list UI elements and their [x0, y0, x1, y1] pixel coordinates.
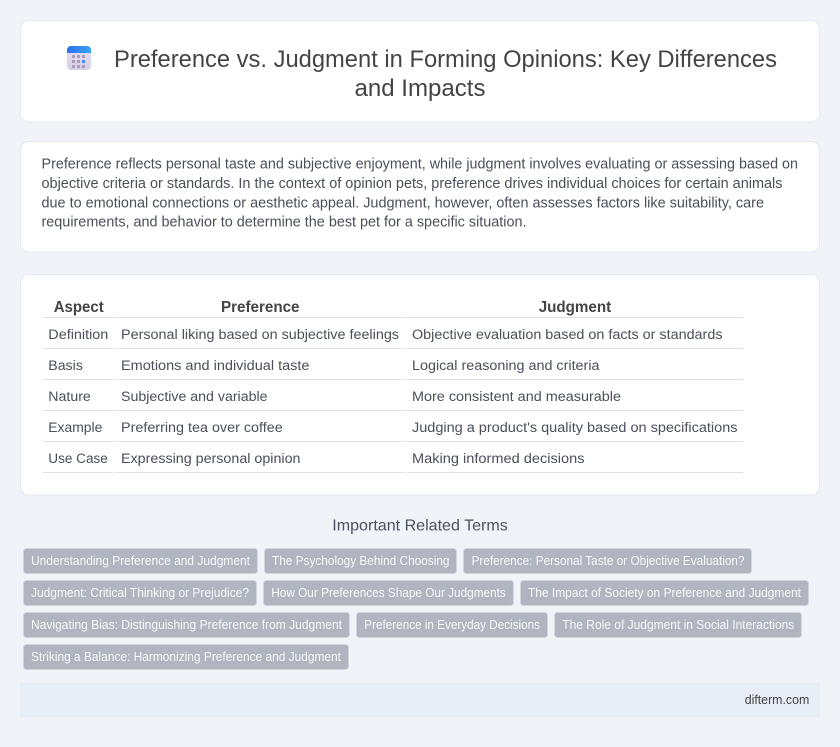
tag: role of judgment in social interactions	[554, 612, 802, 638]
tag: impact of society	[520, 580, 808, 606]
table row: use case	[43, 451, 743, 473]
intro paragraph: objective criteria or standards. In the context of opinion pets, preference drives individual choices for certain animals	[42, 176, 782, 192]
tag: understanding preference and judgment: Understanding Preference and Judgment	[31, 554, 250, 568]
related terms tags	[24, 548, 808, 670]
title: and Impacts	[354, 75, 486, 102]
table header row: Preference	[221, 299, 300, 316]
intro paragraph: requirements, and behavior to determine the best pet for a specific situation.	[42, 215, 526, 231]
table row: definition	[43, 327, 743, 349]
table header row: Aspect	[54, 299, 104, 316]
tag: striking a balance: Striking a Balance: Harmonizing Preference and Judgment	[31, 650, 341, 664]
table row: nature: Subjective and variable	[121, 389, 268, 405]
table row: definition: Objective evaluation based on facts or standards	[412, 327, 722, 343]
table row: definition: Personal liking based on subjective feelings	[121, 327, 399, 343]
title: Preference vs. Judgment in Forming Opinions: Key Differences	[114, 46, 777, 73]
table row: nature: Nature	[48, 389, 91, 405]
table row: example	[43, 420, 743, 442]
panel: comparison table	[20, 274, 820, 495]
table row: example: Example	[48, 420, 102, 436]
footer source text: difterm.com	[745, 692, 809, 707]
tag: navigating bias	[24, 612, 350, 638]
table row: nature: More consistent and measurable	[412, 389, 621, 405]
title	[114, 46, 777, 102]
panel: title header	[20, 20, 820, 122]
table row: basis: Basis	[48, 358, 83, 374]
table row: basis	[43, 358, 743, 380]
tag: how preferences shape judgments: How Our Preferences Shape Our Judgments	[271, 586, 506, 600]
tag: psychology behind choosing	[264, 548, 456, 574]
icon: calendar	[67, 46, 91, 70]
tag: preference in everyday decisions	[356, 612, 548, 638]
table row: basis: Emotions and individual taste	[121, 358, 310, 374]
intro paragraph: due to emotional connections or aesthetic appeal. Judgment, however, often assesses factors like suitability, care	[42, 195, 764, 211]
table row: example: Judging a product's quality based on specifications	[412, 420, 738, 436]
tag: striking a balance	[24, 644, 348, 670]
tag: personal taste or objective evaluation: Preference: Personal Taste or Objective Evaluation?	[472, 554, 744, 568]
tag: psychology behind choosing: The Psychology Behind Choosing	[272, 554, 450, 568]
tag: how preferences shape judgments	[264, 580, 514, 606]
table row: nature	[43, 389, 743, 411]
tag: critical thinking or prejudice	[24, 580, 256, 606]
tag: preference in everyday decisions: Preference in Everyday Decisions	[364, 618, 540, 632]
tag: understanding preference and judgment	[24, 548, 258, 574]
footer	[20, 683, 820, 717]
table row: use case: Making informed decisions	[412, 451, 584, 467]
table row: example: Preferring tea over coffee	[121, 420, 283, 436]
tag: role of judgment in social interactions: The Role of Judgment in Social Interactions	[562, 618, 794, 632]
tag: impact of society: The Impact of Society on Preference and Judgment	[528, 586, 801, 600]
tag: personal taste or objective evaluation	[464, 548, 752, 574]
heading: important related terms: Important Related Terms	[332, 518, 508, 535]
table row: use case: Expressing personal opinion	[121, 451, 300, 467]
table row: use case: Use Case	[48, 451, 108, 467]
tag: navigating bias: Navigating Bias: Distinguishing Preference from Judgment	[31, 618, 342, 632]
intro paragraph: Preference reflects personal taste and subjective enjoyment, while judgment involves evaluating or assessing based on	[42, 156, 798, 172]
tag: critical thinking or prejudice: Judgment: Critical Thinking or Prejudice?	[31, 586, 249, 600]
table header row: Judgment	[539, 299, 612, 316]
intro paragraph	[42, 156, 798, 231]
table header row	[43, 299, 743, 318]
table row: basis: Logical reasoning and criteria	[412, 358, 600, 374]
panel: introduction	[20, 142, 820, 252]
table row: definition: Definition	[48, 327, 108, 343]
